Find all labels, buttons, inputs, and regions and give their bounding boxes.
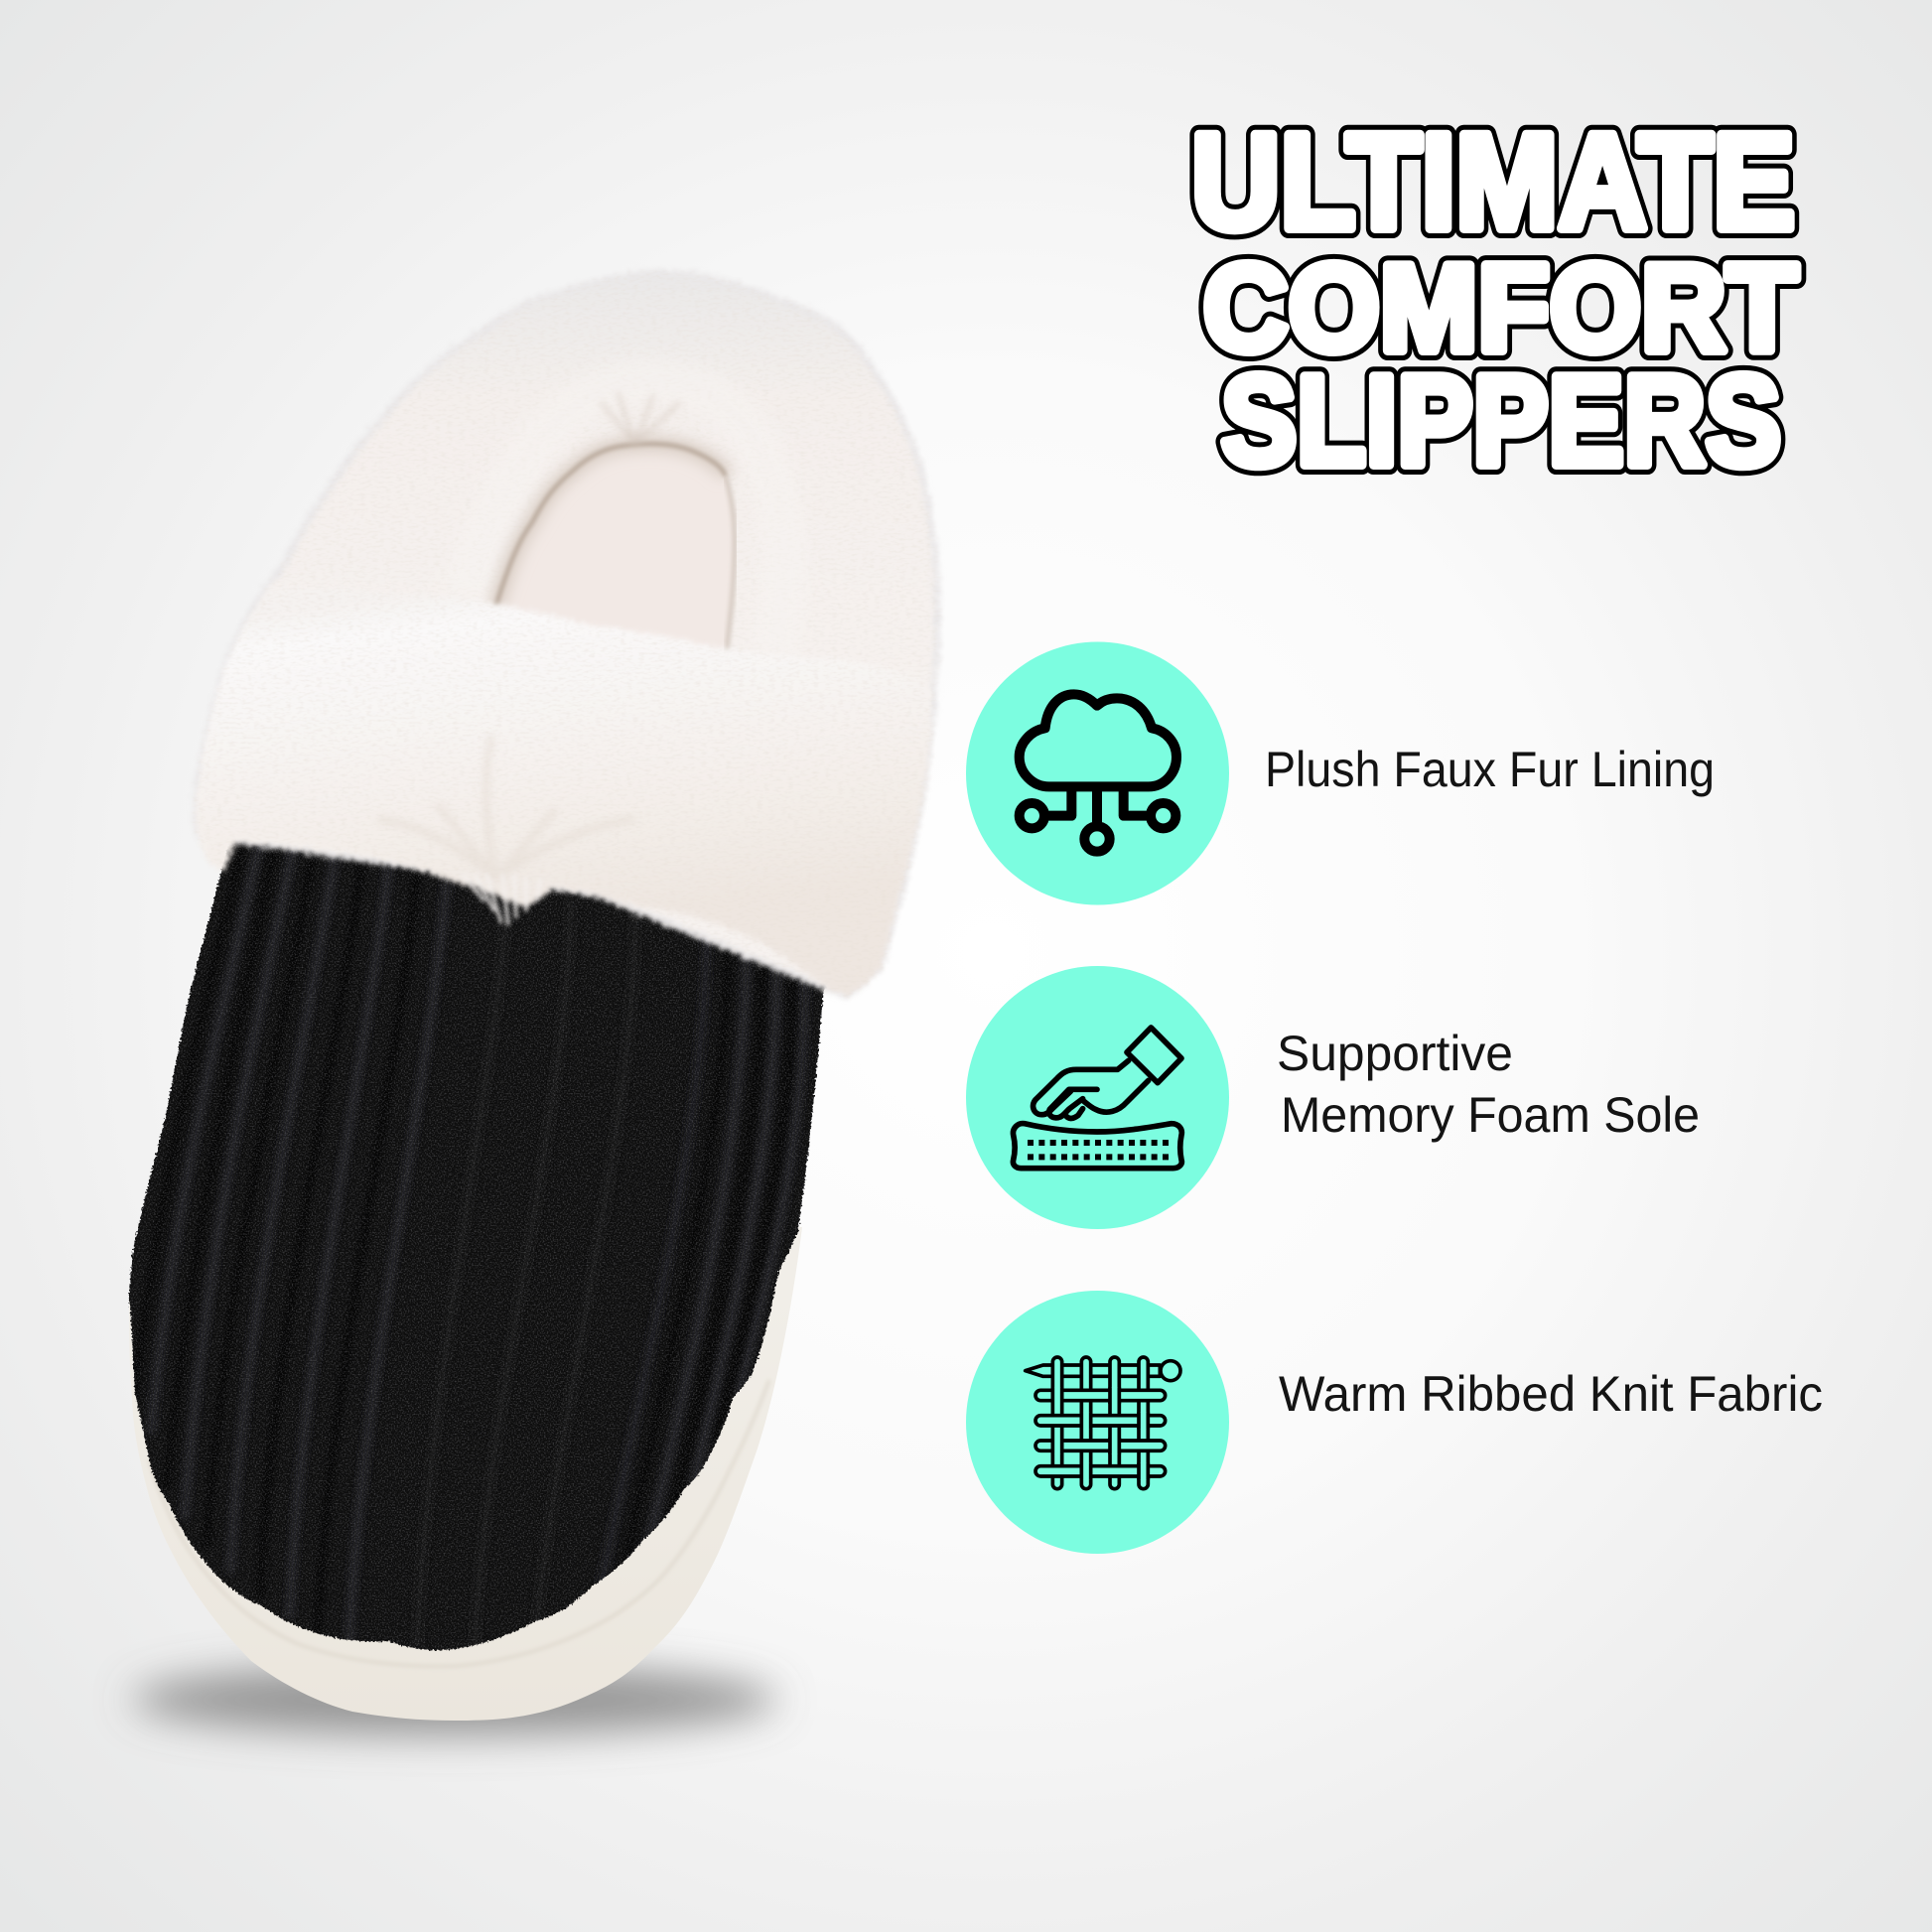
badge circle bbox=[966, 1291, 1229, 1554]
label bbox=[1277, 1026, 1700, 1143]
sole lip line bbox=[149, 1380, 769, 1666]
slipper product illustration bbox=[119, 273, 937, 1735]
title outline layer: ULTIMATE bbox=[1191, 106, 1795, 258]
infographic canvas bbox=[114, 125, 1822, 1761]
feature: supportive memory foam sole bbox=[966, 966, 1700, 1229]
title outline layer: SLIPPERS bbox=[1221, 349, 1781, 492]
title outline layer bbox=[1191, 106, 1798, 492]
ribbed knit upper bbox=[129, 836, 844, 1650]
faux fur back lining bbox=[197, 273, 937, 996]
label: Memory Foam Sole bbox=[1281, 1087, 1700, 1143]
knit ribs bbox=[119, 824, 854, 1668]
title bbox=[1191, 106, 1798, 492]
inner footbed opening bbox=[495, 444, 735, 660]
feature: warm ribbed knit fabric bbox=[966, 1291, 1823, 1554]
badge circle bbox=[966, 641, 1229, 905]
label: Plush Faux Fur Lining bbox=[1265, 742, 1715, 797]
title white fill layer: SLIPPERS bbox=[1221, 349, 1781, 492]
badge circle bbox=[966, 966, 1229, 1229]
icon: hand pressing foam bbox=[1013, 1028, 1181, 1169]
cream sole bbox=[129, 1191, 802, 1721]
fur strands above opening bbox=[601, 392, 680, 445]
label: Supportive bbox=[1277, 1026, 1513, 1081]
faux fur front cuff bbox=[196, 587, 931, 996]
title white fill layer: COMFORT bbox=[1203, 240, 1798, 377]
label: Warm Ribbed Knit Fabric bbox=[1279, 1366, 1823, 1422]
title white fill layer: ULTIMATE bbox=[1191, 106, 1795, 258]
feature: plush faux fur lining bbox=[966, 641, 1715, 905]
title outline layer: COMFORT bbox=[1203, 240, 1798, 377]
fur swirl tuft bbox=[377, 735, 635, 925]
icon: cloud network bbox=[1020, 694, 1176, 852]
ground shadow bbox=[132, 1664, 777, 1735]
title white fill layer bbox=[1191, 106, 1798, 492]
icon: knitting weave with needle bbox=[1026, 1357, 1180, 1489]
soft fur ridge around opening bbox=[467, 381, 784, 655]
